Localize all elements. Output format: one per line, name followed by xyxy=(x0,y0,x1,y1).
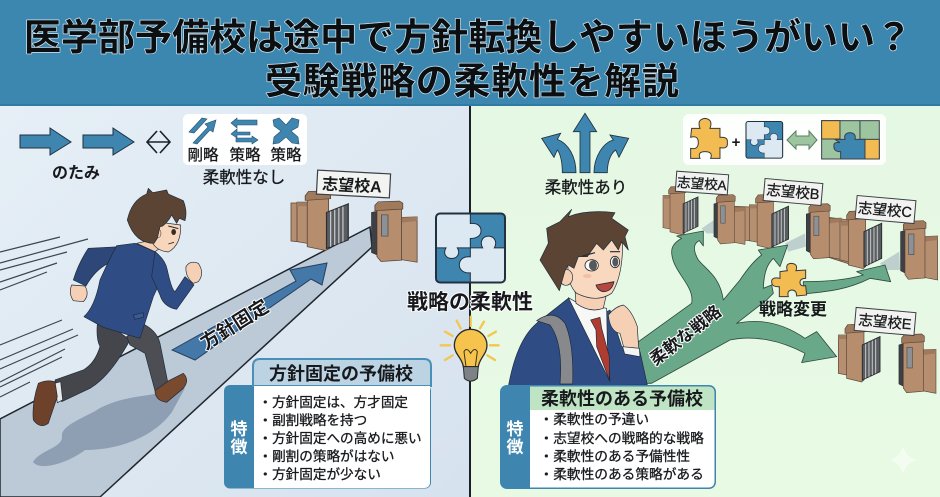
feature items: ・剛割の策略がはない xyxy=(258,448,394,464)
road label: 方針固定 xyxy=(196,295,273,354)
policy-fixed arrows xyxy=(20,128,134,155)
sign C xyxy=(855,196,916,224)
far arm xyxy=(73,247,120,286)
icon: yellow piece xyxy=(691,118,727,158)
icon: double arrow xyxy=(787,131,817,149)
sign B: 志望校B xyxy=(766,182,820,203)
backpack strap xyxy=(537,315,573,384)
hair xyxy=(540,209,628,291)
standing student xyxy=(508,209,647,387)
gate signs xyxy=(675,171,916,336)
wall A-B xyxy=(729,206,757,242)
center divider xyxy=(469,106,471,497)
label: strategy change: 戦略変更 xyxy=(759,299,827,319)
ear xyxy=(559,269,573,285)
brow xyxy=(168,226,178,229)
running student xyxy=(33,188,202,426)
feature items: ・方針固定が少ない xyxy=(258,467,381,482)
sign B xyxy=(763,179,823,205)
branching strategy arrows with gates xyxy=(620,186,938,393)
raised hand xyxy=(608,305,639,348)
body list xyxy=(530,410,714,488)
face xyxy=(568,238,623,298)
plus: + xyxy=(732,134,741,151)
watermark sparkle xyxy=(889,446,917,474)
title banner xyxy=(0,0,940,106)
sign E: 志望校E xyxy=(858,312,913,333)
panel: strategy icons: 策略 xyxy=(229,146,261,164)
back leg xyxy=(55,317,130,402)
feature items: ・柔軟性のある予備性性 xyxy=(540,449,690,464)
icon: blue puzzle xyxy=(746,122,783,158)
sign E xyxy=(854,307,916,336)
panel: left background xyxy=(0,106,470,497)
panel: flexible school xyxy=(500,385,716,489)
eye left xyxy=(585,260,598,271)
title line 1: 医学部予備校は途中で方針転換しやすいほうがいい？ xyxy=(24,17,912,58)
panel: flexible school: 徴 xyxy=(506,438,524,457)
sign A: 志望校A xyxy=(677,175,727,193)
feature items xyxy=(258,395,422,482)
panel: fixed-policy school: 徴 xyxy=(230,438,248,457)
feature items: ・柔軟性の予違い xyxy=(540,412,649,427)
road shadows xyxy=(702,220,715,233)
heading: flexible school xyxy=(530,386,714,410)
icon: puzzle of strategy xyxy=(436,214,505,282)
eye xyxy=(171,229,176,235)
arrow to gate C xyxy=(803,265,891,294)
far hand xyxy=(70,285,87,302)
title line 2: 受験戦略の柔軟性を解説 xyxy=(265,61,679,102)
icon: puzzle piece on path xyxy=(772,263,807,297)
feature items: ・柔軟性のある策略がある xyxy=(540,466,704,482)
heading: fixed-policy school xyxy=(253,359,431,386)
cheek xyxy=(583,274,592,278)
gate E xyxy=(838,324,936,393)
front leg xyxy=(127,323,169,391)
runner's shadow xyxy=(33,388,185,466)
gate A xyxy=(663,186,745,244)
sign: 志望校A xyxy=(322,174,383,197)
flexible strategy arrow xyxy=(620,231,837,383)
feature items: ・志望校への戦略的な戦略 xyxy=(540,431,704,446)
icon: parallel arrows xyxy=(189,118,216,144)
wall B-C xyxy=(824,217,849,264)
cuff xyxy=(623,347,640,357)
icon: combined puzzle xyxy=(822,121,879,159)
label: flexible strategy: 柔軟な戦略 xyxy=(646,301,725,369)
brows xyxy=(583,252,620,256)
panel: flexible school: 柔軟性のある予備校 xyxy=(541,389,703,409)
neck and collar xyxy=(137,240,160,252)
icon: opposing arrows xyxy=(231,118,258,144)
feature items: ・方針固定への高めに悪い xyxy=(258,430,422,446)
panel: strategy icons: 策略 xyxy=(270,146,302,164)
tie xyxy=(591,317,609,380)
icon: light bulb xyxy=(441,317,499,381)
road to target school xyxy=(0,227,372,497)
eye right xyxy=(610,256,620,268)
road arrow: fixed policy xyxy=(172,263,327,360)
icon: cross arrows xyxy=(273,118,299,144)
near arm xyxy=(152,252,194,309)
label: no flexibility: 柔軟性なし xyxy=(203,168,285,187)
panel: puzzle combination xyxy=(683,114,886,165)
jacket xyxy=(508,298,647,387)
feature items xyxy=(540,412,704,482)
label: flexible: 柔軟性あり xyxy=(545,178,627,197)
sock xyxy=(55,382,63,403)
body list xyxy=(254,386,430,488)
hair xyxy=(127,188,186,243)
panel: fixed-policy school: 方針固定の予備校 xyxy=(269,363,413,384)
speed lines xyxy=(0,237,88,397)
face xyxy=(151,222,181,252)
ear xyxy=(156,229,161,238)
feature items: ・副割戦略を持つ xyxy=(258,413,367,428)
jacket pocket xyxy=(133,313,143,319)
near hand xyxy=(186,262,202,283)
mouth xyxy=(596,282,614,292)
features tab label: 特 xyxy=(230,420,248,439)
shirt xyxy=(568,298,610,382)
neck xyxy=(575,290,607,310)
feature items: ・方針固定は、方才固定 xyxy=(258,395,408,410)
front shoe xyxy=(155,373,187,402)
gate B xyxy=(749,194,841,259)
sign C: 志望校C xyxy=(857,200,913,221)
panel: strategy icons xyxy=(183,114,307,165)
icon labels: 剛略 xyxy=(187,146,219,164)
panel: fixed-policy school xyxy=(224,359,431,488)
no-change symbol xyxy=(147,131,170,153)
features tab label: 特 xyxy=(506,420,524,439)
gate C xyxy=(840,211,938,280)
right side: branching arrows icon xyxy=(542,113,629,173)
jacket xyxy=(84,243,164,338)
target school gate A (left) xyxy=(291,170,417,262)
label: のたみ: のたみ xyxy=(52,164,100,182)
mouth xyxy=(168,242,174,244)
rear shoe xyxy=(33,381,57,426)
label: flexibility of strategy: 戦略の柔軟性 xyxy=(407,291,533,314)
panel: right background xyxy=(470,106,940,497)
